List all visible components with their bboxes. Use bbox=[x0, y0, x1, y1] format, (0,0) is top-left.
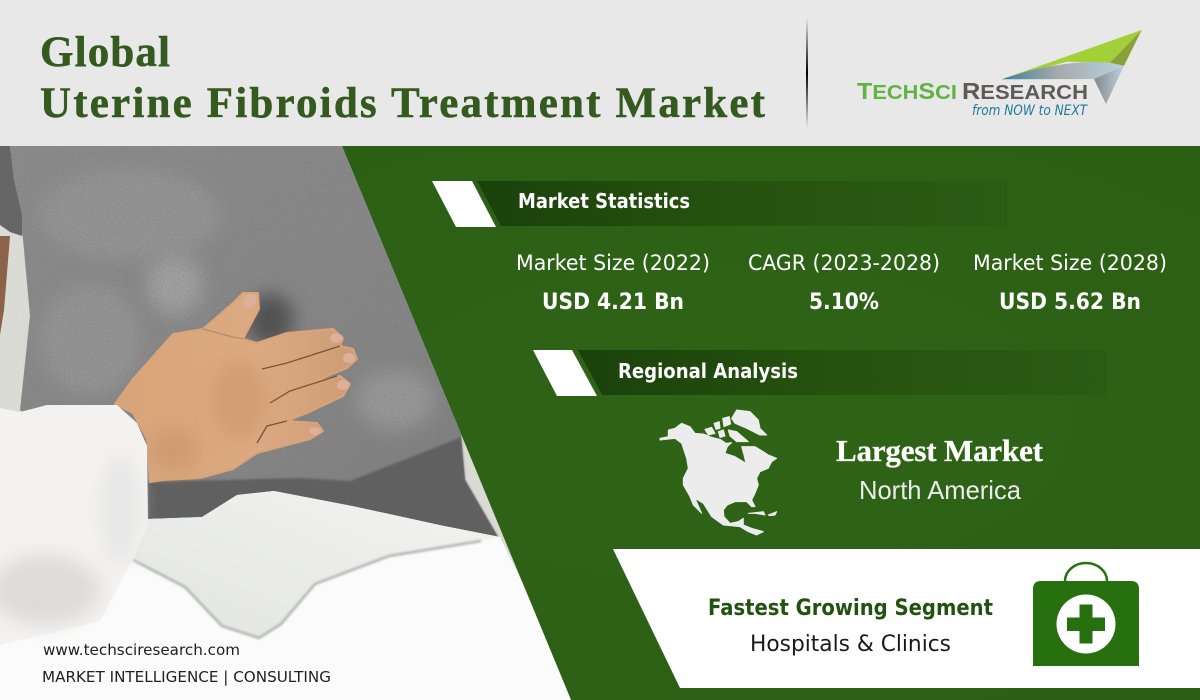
photo backdrop bbox=[0, 146, 600, 700]
icon: medical bag bbox=[1033, 563, 1139, 666]
stat: market size 2028: Market Size (2028) bbox=[973, 251, 1167, 276]
panel: regional analysis bbox=[533, 350, 1107, 535]
stat: CAGR bbox=[748, 251, 940, 315]
stat: market size 2028 bbox=[973, 251, 1167, 315]
stat: market size 2022: Market Size (2022) bbox=[516, 251, 710, 276]
stat: CAGR: CAGR (2023-2028) bbox=[748, 251, 940, 276]
hand bbox=[115, 291, 357, 482]
divider bbox=[806, 18, 808, 128]
banner: regional analysis: Regional Analysis bbox=[618, 359, 798, 383]
patient arm bbox=[0, 236, 10, 335]
stat: market size 2028: USD 5.62 Bn bbox=[999, 289, 1141, 315]
bed sheet bbox=[0, 491, 580, 700]
label: largest market: North America bbox=[859, 475, 1022, 505]
map: North America bbox=[660, 410, 777, 535]
photo: doctor's hand on patient's abdomen bbox=[0, 146, 600, 700]
segment label: Fastest Growing Segment bbox=[708, 595, 993, 621]
logo wordmark bbox=[857, 78, 1088, 104]
stat: market size 2022: USD 4.21 Bn bbox=[542, 289, 684, 315]
label: largest market bbox=[836, 433, 1044, 505]
green background panel bbox=[0, 146, 1200, 700]
label: largest market: Largest Market bbox=[836, 433, 1044, 468]
shirt bbox=[0, 146, 498, 537]
banner: market statistics bbox=[432, 181, 1007, 227]
doctor sleeve bbox=[0, 405, 148, 645]
logo tagline: from NOW to NEXT bbox=[972, 103, 1088, 119]
stat: market size 2022 bbox=[516, 251, 710, 315]
footer text: www.techsciresearch.com bbox=[43, 641, 240, 659]
panel: fastest growing segment bbox=[613, 549, 1200, 688]
logo mark bbox=[1002, 30, 1142, 104]
footer text bbox=[42, 641, 331, 686]
panel: market statistics bbox=[432, 181, 1167, 315]
title: Uterine Fibroids Treatment Market bbox=[40, 80, 766, 127]
logo: TechSci Research bbox=[857, 30, 1142, 119]
segment label: Hospitals & Clinics bbox=[750, 632, 951, 657]
logo wordmark: TECHSCI bbox=[857, 78, 957, 104]
banner: regional analysis bbox=[533, 350, 1107, 396]
title bbox=[40, 29, 766, 127]
stat: CAGR: 5.10% bbox=[809, 289, 879, 315]
footer text: MARKET INTELLIGENCE | CONSULTING bbox=[42, 668, 331, 686]
logo wordmark: RESEARCH bbox=[962, 78, 1088, 104]
segment label bbox=[708, 595, 993, 657]
title: Global bbox=[40, 29, 170, 76]
banner: market statistics: Market Statistics bbox=[518, 189, 690, 213]
header band bbox=[0, 0, 1200, 146]
